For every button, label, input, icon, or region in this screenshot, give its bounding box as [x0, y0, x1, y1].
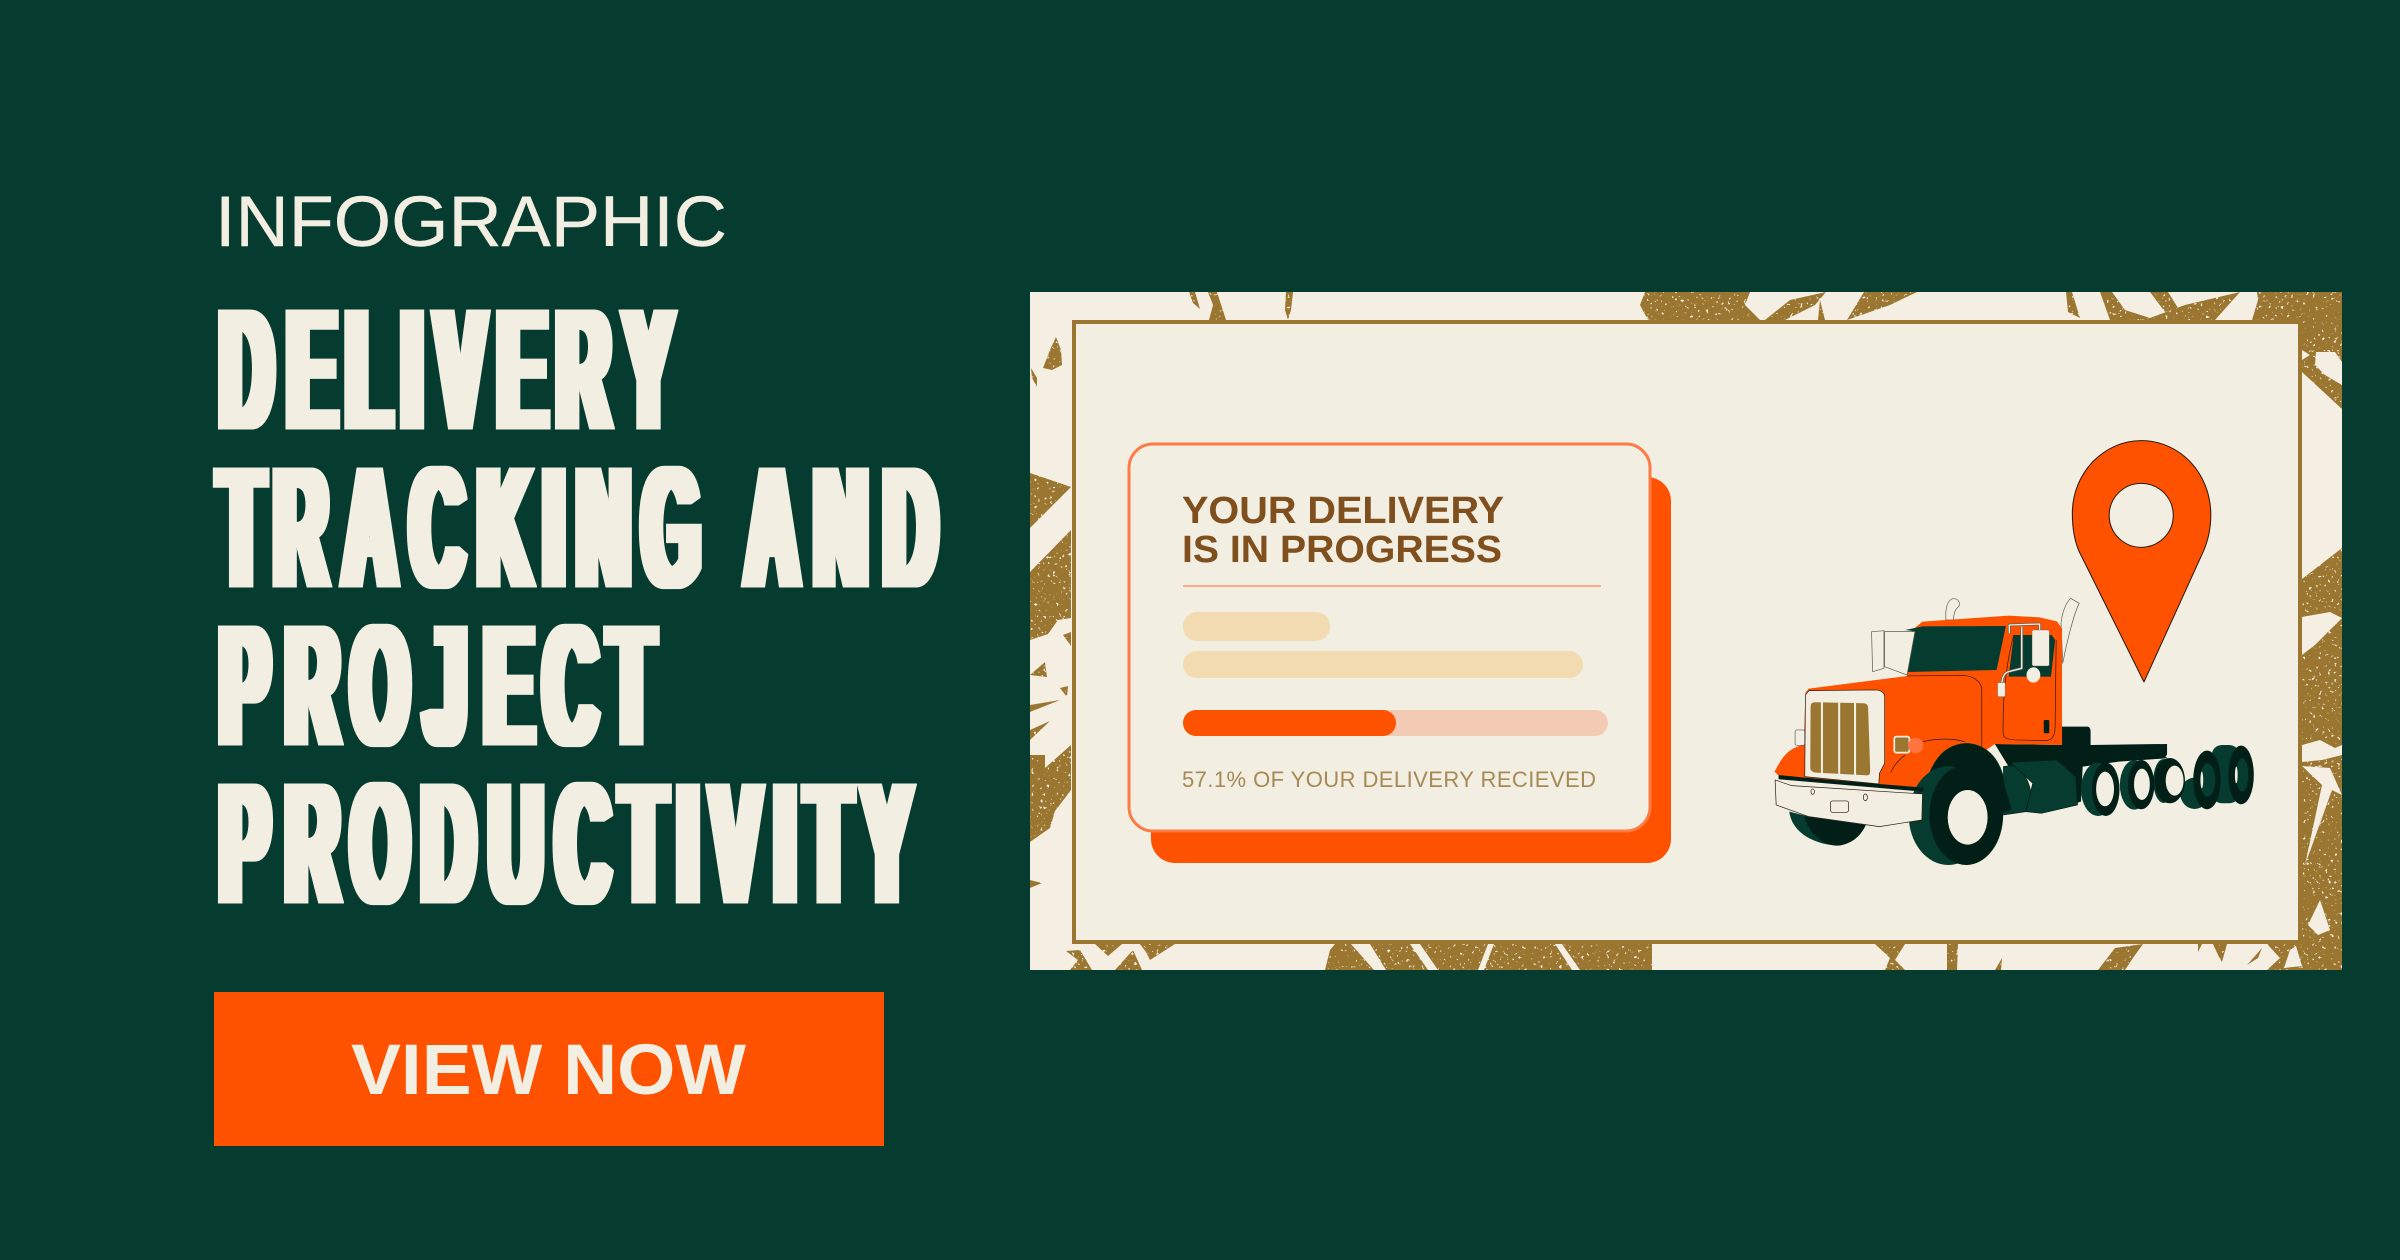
windshield — [1905, 626, 2006, 672]
icon: location pin — [2072, 441, 2211, 682]
card heading — [1182, 490, 1504, 571]
small front mirror — [1795, 730, 1805, 745]
card face — [1129, 444, 1650, 831]
headlight — [1894, 737, 1923, 753]
placeholder bars — [1183, 612, 1583, 678]
title: TRACKING AND — [219, 432, 937, 625]
dark stripe above bumper — [1779, 775, 1924, 792]
title: DELIVERY — [220, 274, 673, 467]
truck and location pin illustration — [1774, 441, 2254, 865]
gold grunge border texture — [1030, 292, 2342, 970]
delivery status card — [1129, 444, 1671, 863]
far front wheel — [1789, 812, 1866, 846]
door handle — [2044, 720, 2049, 733]
card heading: YOUR DELIVERY — [1182, 490, 1504, 532]
inner framed panel — [1074, 322, 2300, 942]
fuel tank and step box — [2003, 760, 2078, 815]
wind deflector — [1872, 631, 1915, 675]
card heading: IS IN PROGRESS — [1182, 529, 1502, 571]
heading rule — [1183, 585, 1601, 587]
button: VIEW NOW — [214, 992, 884, 1146]
radiator grille — [1810, 702, 1870, 775]
title — [219, 274, 937, 941]
progress caption: 57.1% OF YOUR DELIVERY RECIEVED — [1182, 767, 1596, 792]
cream cut-outs in the texture — [1351, 350, 2342, 970]
rear chassis — [1995, 727, 2167, 803]
title: PRODUCTIVITY — [220, 748, 911, 941]
progress bar — [1183, 710, 1608, 736]
eyebrow: INFOGRAPHIC: INFOGRAPHIC — [215, 183, 727, 262]
front bumper — [1775, 780, 1923, 827]
rear wheels — [2081, 744, 2254, 816]
title: PROJECT — [220, 590, 654, 783]
panel: illustration card — [1030, 292, 2342, 970]
door window — [2009, 635, 2055, 677]
front wheel and fender — [1909, 743, 2012, 865]
exhaust stacks — [1946, 598, 2079, 663]
icon: truck — [1774, 598, 2254, 865]
door and body lines — [1891, 635, 2056, 773]
card shadow — [1151, 477, 1671, 863]
side mirror — [1998, 624, 2049, 697]
button: VIEW NOW: VIEW NOW — [351, 1031, 746, 1110]
radiator surround — [1805, 690, 1885, 784]
cab and hood body — [1774, 616, 2062, 788]
